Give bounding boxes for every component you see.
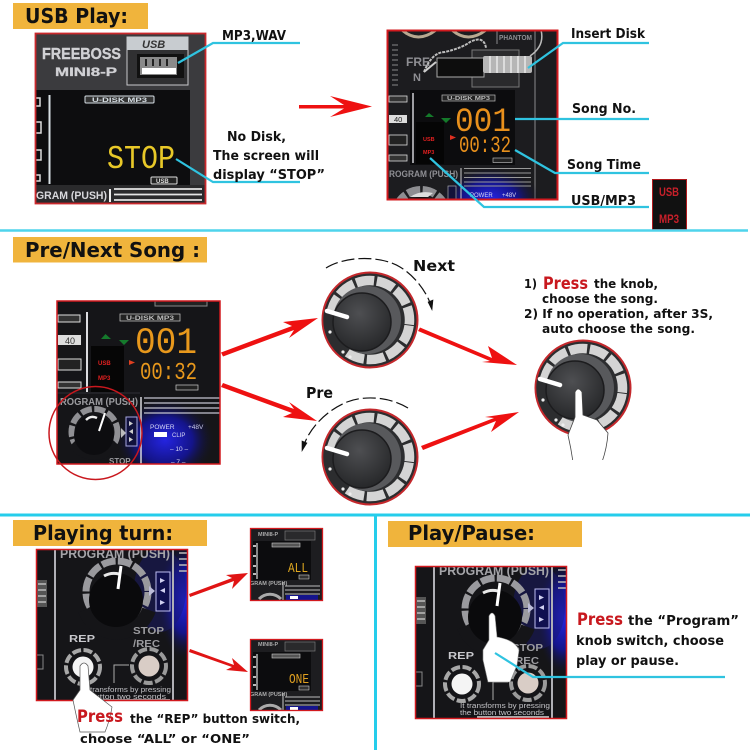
heading: Playing turn: Playing turn: [33,521,173,545]
panel: program knob press photo [415,557,589,718]
display: ONE: ONE [289,672,309,688]
callout text: no disk [213,130,325,183]
knob [396,186,446,198]
mode labels [389,96,407,161]
program knob [72,409,118,455]
label: MINI8-P: MINI8-P [258,642,278,648]
arrow: panel to pre knob [221,383,317,421]
USB stick [424,30,542,77]
badge: USB MP3 [652,180,686,230]
note text [460,703,550,717]
callout: red circle around knob [49,386,142,480]
icon: pre knob [322,410,418,504]
instructions text [524,274,713,336]
callout text: no disk: The screen will [213,149,319,164]
label: STOP/REC: /REC [133,638,160,650]
arc: pre rotation [302,398,408,451]
note text: the button two seconds [460,710,545,717]
mode labels: 40 [394,115,402,124]
instruction text: REP [77,707,300,746]
heading: Play/Pause: Play/Pause: [408,521,535,545]
display: song time: 00:32 [140,360,197,387]
meter labels [150,424,204,466]
callout leader: STOP [176,159,300,182]
callout leader: Insert Disk [528,43,649,68]
label: U-DISK MP3 [120,314,180,322]
panel: display and program knob [58,302,220,464]
label: PHANTOM: PHANTOM [499,35,532,42]
label: USB: USB [156,179,169,185]
label: STOP: STOP [109,457,131,466]
instruction text: REP: Press [77,707,123,726]
label: STOP/REC: STOP [512,642,543,654]
heading: Play/Pause [388,521,582,547]
meter labels: – 10 – [170,446,188,453]
indicator: USB MP3: MP3 [98,376,111,382]
label: USB [493,158,512,162]
badge: USB MP3: MP3 [659,214,679,226]
logo: FREEBOSS: FREEBOSS [42,46,121,63]
USB port: USB [142,39,165,51]
icon: pressing hand on knob [568,389,608,462]
instruction text: play pause: play or pause. [576,654,679,669]
panel: ONE mode [250,639,323,712]
mode labels: 40 [65,336,75,346]
label: PROGRAM (PUSH): GRAM (PUSH) [36,190,107,202]
panel: inserted disk mixer photo: N [413,72,421,84]
note text: transforms by pressing [90,687,171,694]
label: USB [176,385,198,390]
arrow: to ONE panel [189,649,248,672]
logo: model name: MINI8-P [55,67,117,79]
icon: next knob [322,272,418,368]
label: PROGRAM (PUSH): PROGRAM (PUSH) [439,563,549,578]
callout text: no disk: display “STOP” [213,168,325,183]
badge: USB MP3: USB [659,187,679,199]
instructions text: choose the song. [542,291,658,306]
logo fragment: FRE [406,55,430,69]
instructions text: 2) If no operation, after 3S, [524,306,713,321]
instruction text: play pause: Press [577,610,623,629]
callout text: Song No.: Song No. [572,102,636,117]
note text: It transforms by pressing [460,703,550,710]
icon: pressing hand on REP [73,663,112,732]
panel: REP button photo [37,550,187,700]
meter labels: +48V [188,424,204,431]
display: ALL: ALL [288,561,308,577]
display: song number: 001 [455,104,511,142]
label: PROGRAM: GRAM (PUSH) [250,692,287,698]
label: STOP/REC [512,642,543,667]
labels: POWER +48V: +48V [502,193,516,199]
indicator: USB MP3: USB [98,361,111,367]
label: REP: REP [448,650,474,662]
meter labels: CLIP [172,433,185,439]
arrow: red right [299,96,372,117]
labels: POWER +48V: POWER [470,193,493,199]
label: PROGRAM (PUSH): ROGRAM (PUSH) [60,397,138,408]
meter labels: POWER [150,424,175,431]
instruction text: REP: the “REP” button switch, [130,711,300,726]
panel: inserted disk mixer photo [388,32,556,198]
label: U-DISK MP3: U-DISK MP3 [126,316,175,322]
instruction text: play pause [576,610,739,669]
display: song number: 001 [135,323,197,365]
USB port [127,37,188,85]
callout leader: MP3,WAV [178,43,300,63]
note text [90,686,170,699]
callout text: USB/MP3: USB/MP3 [571,194,636,209]
note text: button two seconds [90,694,167,701]
instructions text: the knob, [594,276,658,291]
instruction text: play pause: knob switch, choose [576,634,724,649]
arrow: to ALL panel [189,573,248,597]
instruction text: REP: choose “ALL” or “ONE” [80,731,250,746]
instructions text: Press [543,274,588,293]
label: Next: Next [413,257,456,275]
instruction text: play pause: the “Program” [628,614,739,629]
label: STOP/REC [133,627,164,647]
panel: no disk mixer photo [35,33,206,204]
indicator: USB MP3 [423,137,434,154]
indicator: USB MP3: MP3 [423,150,434,156]
label: U-DISK MP3: U-DISK MP3 [92,97,148,104]
heading: USB Play: USB Play: [25,4,128,28]
display: song time: 00:32 [459,133,511,159]
heading: Pre/Next Song: Pre/Next Song : [25,238,200,262]
indicator: USB MP3 [98,360,110,380]
label: MINI8-P: MINI8-P [258,532,278,538]
label: U-DISK MP3: U-DISK MP3 [447,96,490,102]
label: U-DISK MP3 [442,95,495,102]
panel: ALL mode [250,528,323,601]
callout text: no disk: No Disk, [227,130,286,145]
display: STOP: STOP [107,141,175,178]
callout text: Insert Disk: Insert Disk [571,27,645,42]
arrow: panel to next knob [221,318,318,356]
callout text: Song Time: Song Time [567,158,641,173]
callout text: MP3,WAV: MP3,WAV [222,29,286,44]
label: U-DISK MP3 [85,96,154,104]
callout leader: program knob [495,653,725,677]
arrow: next knob to press [418,328,517,365]
arrow: pre knob to press [421,412,519,450]
icon: pressing hand on knob [483,613,519,682]
mode labels [58,315,81,388]
arc: next rotation [326,258,433,310]
icon: press knob [536,340,630,436]
callout leader: Song Time [515,150,649,173]
label: PROGRAM: ROGRAM (PUSH) [389,169,458,180]
label: STOP/REC: /REC [512,655,539,667]
labels: POWER +48V [470,192,516,197]
callout leader: Song No. [515,118,649,120]
indicator: USB MP3: USB [423,137,435,143]
callout leader: USB/MP3 [430,158,649,207]
label: PROGRAM (PUSH): PROGRAM (PUSH) [60,546,170,561]
label: STOP/REC: STOP [133,625,164,637]
label: REP: REP [69,633,95,645]
label: USB [151,177,177,185]
label: PROGRAM: GRAM (PUSH) [250,581,287,587]
meter labels: – 7 – [171,459,186,466]
label: Pre: Pre [306,384,333,402]
heading: Playing turn [13,520,207,546]
instructions text: 1) [524,276,537,291]
instructions text: auto choose the song. [542,321,695,336]
